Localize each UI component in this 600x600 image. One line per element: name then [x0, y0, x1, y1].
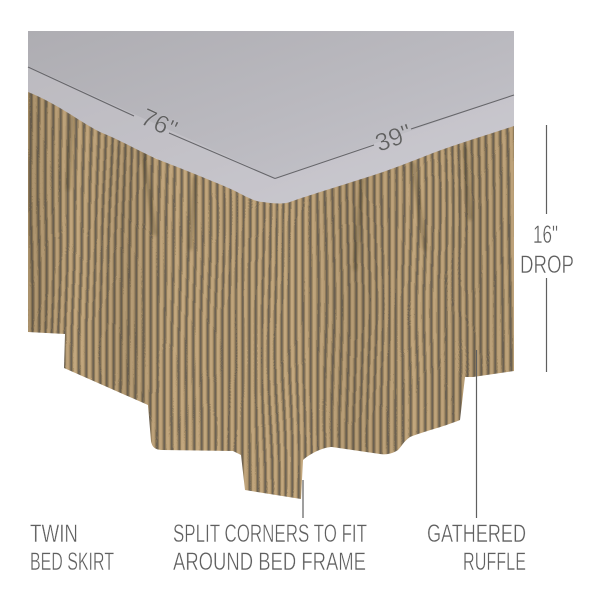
- dimension: 16 inch drop: [520, 125, 574, 372]
- callout: gathered ruffle: RUFFLE: [463, 548, 526, 576]
- dimension: 16 inch drop: DROP: [520, 251, 574, 279]
- callout: gathered ruffle: [427, 350, 526, 576]
- dimension: 76 inch length: [28, 67, 275, 178]
- striped bed skirt: [28, 92, 514, 499]
- label: twin bed skirt: [30, 520, 114, 576]
- dimension: 16 inch drop: 16": [533, 221, 558, 249]
- label: twin bed skirt: TWIN: [30, 520, 78, 548]
- dimension: 39 inch width: 39": [371, 119, 416, 158]
- callout: split corners: AROUND BED FRAME: [173, 548, 366, 576]
- callout: split corners: SPLIT CORNERS TO FIT: [173, 520, 367, 548]
- dimension: 76 inch length: 76": [136, 103, 182, 144]
- label: twin bed skirt: BED SKIRT: [30, 548, 114, 576]
- bed sheet top: [28, 31, 514, 204]
- dimension: 39 inch width: [275, 95, 514, 178]
- callout: split corners: [173, 480, 367, 576]
- callout: gathered ruffle: GATHERED: [427, 520, 526, 548]
